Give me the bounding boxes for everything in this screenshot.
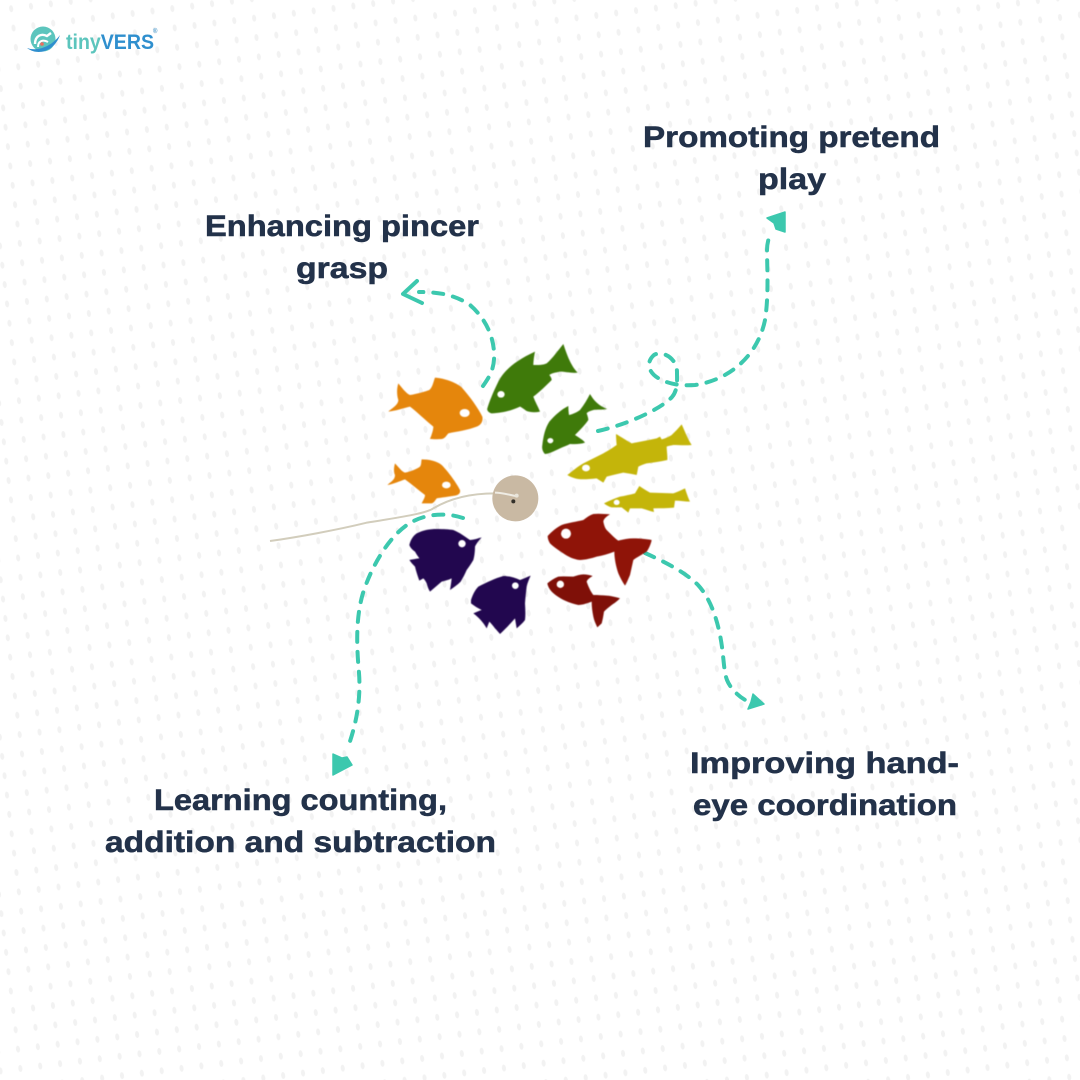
fish: yellow large bbox=[567, 424, 692, 483]
arrow: to Learning counting bbox=[333, 515, 463, 775]
fishing string bbox=[270, 493, 517, 541]
label: Learning counting, addition and subtraction: addition and subtraction bbox=[105, 826, 496, 859]
fish: red small bbox=[547, 574, 620, 627]
fish game set bbox=[270, 344, 692, 634]
label: Enhancing pincer grasp: Enhancing pincer bbox=[205, 210, 479, 243]
fish: purple small bbox=[471, 576, 531, 634]
fish: orange large bbox=[388, 378, 483, 439]
all fish shapes bbox=[387, 344, 692, 634]
label: Enhancing pincer grasp bbox=[205, 210, 479, 285]
label: Learning counting, addition and subtraction bbox=[105, 784, 496, 859]
fish: purple large bbox=[409, 529, 482, 592]
fish: yellow small bbox=[604, 486, 690, 513]
label: Improving hand-eye coordination: Improving hand- bbox=[690, 747, 959, 780]
arrow: to Improving hand-eye coordination bbox=[645, 553, 764, 709]
label: Improving hand-eye coordination bbox=[690, 747, 959, 822]
label: Improving hand-eye coordination: eye coordination bbox=[693, 789, 957, 822]
label: Promoting pretend play bbox=[643, 121, 940, 196]
logo: tinyvers bbox=[27, 26, 158, 54]
fish: orange small bbox=[387, 459, 460, 503]
label: Enhancing pincer grasp: grasp bbox=[296, 252, 388, 285]
logo wordmark: tinyVERS bbox=[66, 31, 154, 54]
fish: red large bbox=[548, 514, 652, 586]
fish: green large bbox=[487, 344, 578, 413]
icon: logo globe bbox=[27, 26, 60, 52]
arrow: to Promoting pretend play bbox=[598, 212, 785, 431]
magnet disc bbox=[492, 475, 538, 521]
label: Promoting pretend play: Promoting pretend bbox=[643, 121, 940, 154]
label: Promoting pretend play: play bbox=[758, 163, 826, 196]
fish: green small bbox=[542, 394, 607, 454]
registered mark: ® bbox=[153, 28, 158, 35]
arrow: to Enhancing pincer grasp bbox=[403, 281, 494, 386]
label: Learning counting, addition and subtraction: Learning counting, bbox=[154, 784, 447, 817]
